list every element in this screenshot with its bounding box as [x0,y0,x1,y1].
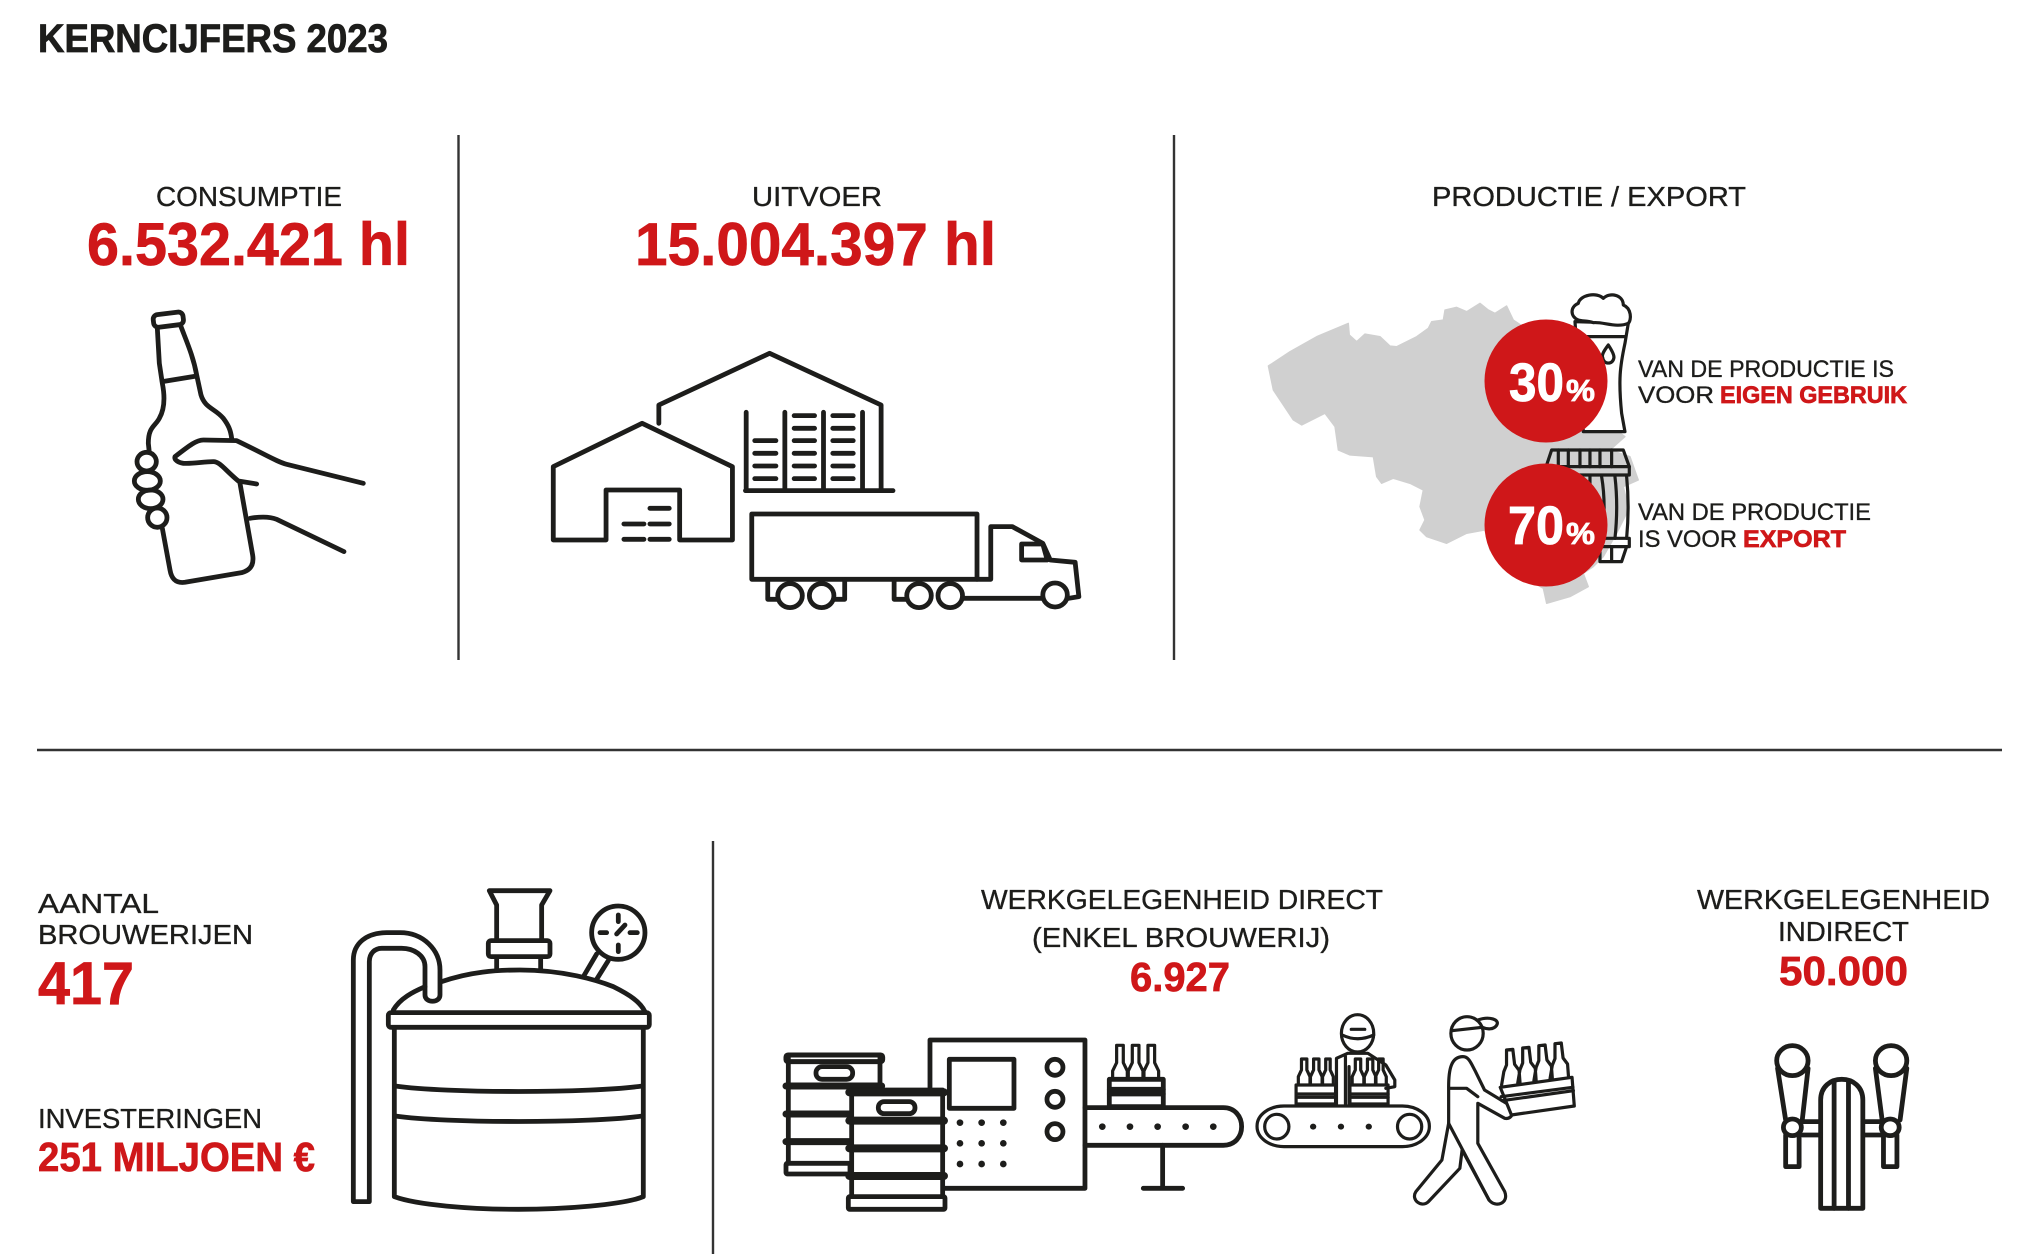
text: export: IS VOOR [1638,526,1737,553]
heading: investeringen: INVESTERINGEN [38,1103,262,1134]
heading: werkgelegenheid indirect [1697,884,1990,947]
icon: filling machine with kegs [786,1040,1242,1209]
badge: 70%: 70 [1508,496,1564,556]
text: eigen gebruik: VAN DE PRODUCTIE IS [1638,356,1894,383]
text: eigen gebruik: VOOR [1638,382,1714,409]
heading: werkgelegenheid direct: WERKGELEGENHEID DIRECT [981,884,1383,915]
heading: werkgelegenheid indirect: INDIRECT [1778,916,1909,947]
value: uitvoer: 15.004.397 hl [635,211,996,278]
icon: beer glass [1572,295,1630,432]
icon: hand holding bottle [134,312,363,582]
icon: brew kettle [353,891,649,1209]
heading: aantal brouwerijen [38,888,253,950]
heading: aantal brouwerijen: AANTAL [38,888,159,919]
icon: man carrying crate [1414,1017,1574,1204]
badge: 70% [1484,464,1608,586]
badge: 30%: % [1566,373,1595,408]
text: export: VAN DE PRODUCTIE [1638,499,1871,526]
text: eigen gebruik: EIGEN GEBRUIK [1720,382,1908,409]
icon: barrel [1540,450,1629,562]
icon: beer taps [1777,1046,1907,1208]
value: 417: 417 [38,950,134,1017]
heading: productie / export: PRODUCTIE / EXPORT [1432,181,1746,212]
heading: aantal brouwerijen: BROUWERIJEN [38,919,253,950]
value: 6.927: 6.927 [1130,954,1230,1000]
heading: werkgelegenheid indirect: WERKGELEGENHEID [1697,884,1990,915]
panel: productie / export [1268,181,1908,603]
badge: 70%: % [1566,516,1595,551]
heading: werkgelegenheid direct: (ENKEL BROUWERIJ) [1032,922,1330,953]
map of Belgium [1268,303,1638,603]
icon: warehouses and truck [553,353,1079,608]
title: KERNCIJFERS 2023 [38,17,388,61]
value: consumptie: 6.532.421 hl [87,211,410,278]
panel: uitvoer [553,181,1079,608]
badge: 30%: 30 [1509,353,1564,413]
panel: brouwerijen en investeringen [38,888,649,1209]
text: export [1638,499,1871,553]
heading: consumptie: CONSUMPTIE [156,181,342,212]
text: export: EXPORT [1743,526,1846,553]
panel: werkgelegenheid indirect [1697,884,1990,1208]
value: 251 miljoen euro: 251 MILJOEN € [38,1134,315,1180]
text: eigen gebruik [1638,356,1908,409]
panel: werkgelegenheid direct [786,884,1574,1209]
value: 50.000: 50.000 [1779,948,1908,994]
icon: worker at conveyor [1257,1015,1429,1147]
badge: 30% [1484,320,1608,442]
heading: werkgelegenheid direct [981,884,1383,953]
panel: consumptie [87,181,410,582]
heading: uitvoer: UITVOER [752,181,882,212]
